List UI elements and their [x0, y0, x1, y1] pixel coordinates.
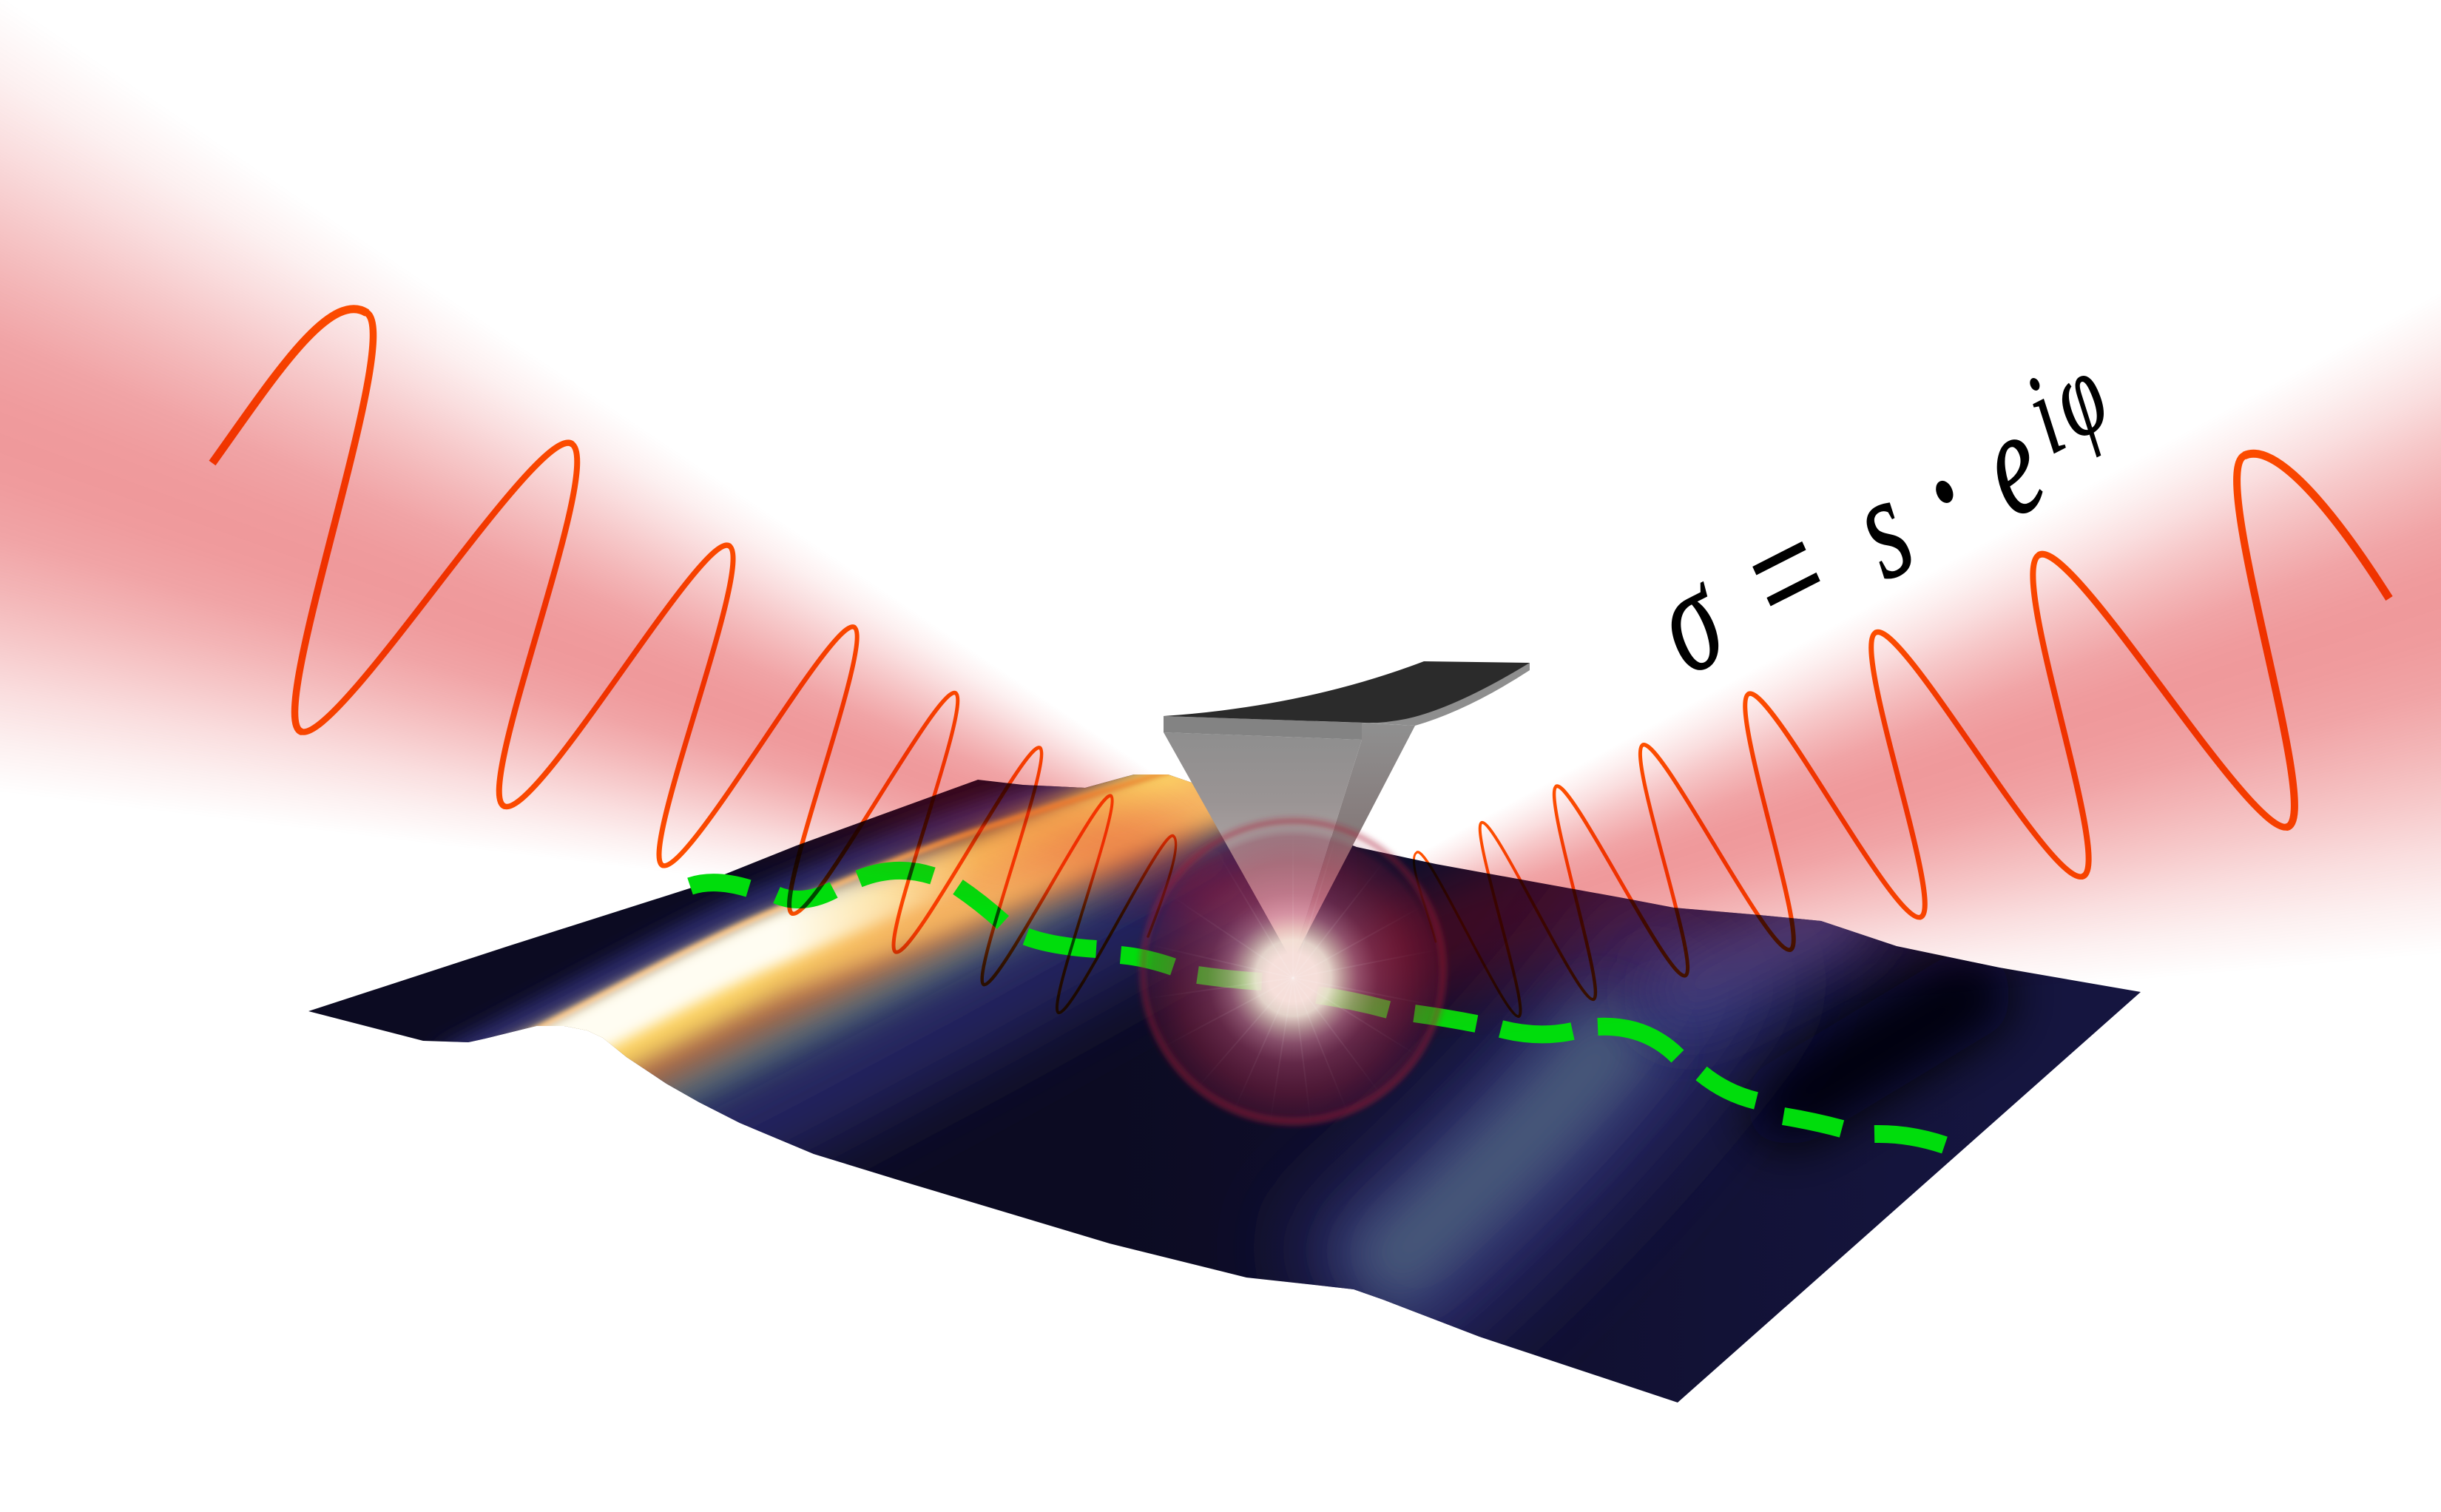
scattered wave — [1414, 453, 2389, 1016]
ridge white crest — [444, 766, 1272, 1106]
ridge upper navy rim — [436, 774, 1138, 1042]
equation: i — [2008, 353, 2081, 479]
near-field lens flare — [1141, 821, 1445, 1130]
equation: = — [1717, 472, 1855, 674]
glow — [1141, 826, 1445, 1130]
right laser beam — [1343, 320, 2441, 1021]
equation: · — [1882, 387, 2007, 595]
green dashed line profile — [690, 871, 1945, 1145]
left laser beam — [0, 41, 1262, 917]
cantilever edge — [1364, 663, 1530, 726]
equation: σ — [1632, 530, 1749, 706]
pyramid side face — [1292, 723, 1415, 962]
flare ring — [1143, 821, 1443, 1121]
upper violet patch — [1687, 914, 1834, 991]
sample surface height map — [296, 723, 2145, 1405]
dark zone right — [1790, 995, 1968, 1102]
slate band — [1368, 1017, 1627, 1283]
ridge teal — [644, 820, 1230, 1113]
AFM probe — [1164, 661, 1530, 962]
cantilever top — [1164, 661, 1530, 723]
equation: e — [1956, 377, 2065, 549]
equation: s — [1829, 442, 1934, 611]
ridge orange wash upper — [740, 773, 1272, 995]
ridge gold — [490, 774, 1218, 1073]
ridge thin orange rim — [444, 738, 1272, 1078]
rays — [1147, 830, 1438, 1125]
ridge brown — [617, 780, 1226, 1098]
cantilever front edge — [1164, 716, 1362, 740]
ridge outer navy — [644, 831, 1266, 1167]
equation: φ — [2032, 328, 2124, 465]
incident wave — [212, 309, 1176, 1013]
pyramid front face — [1164, 732, 1362, 962]
navy band — [1346, 917, 1716, 1317]
